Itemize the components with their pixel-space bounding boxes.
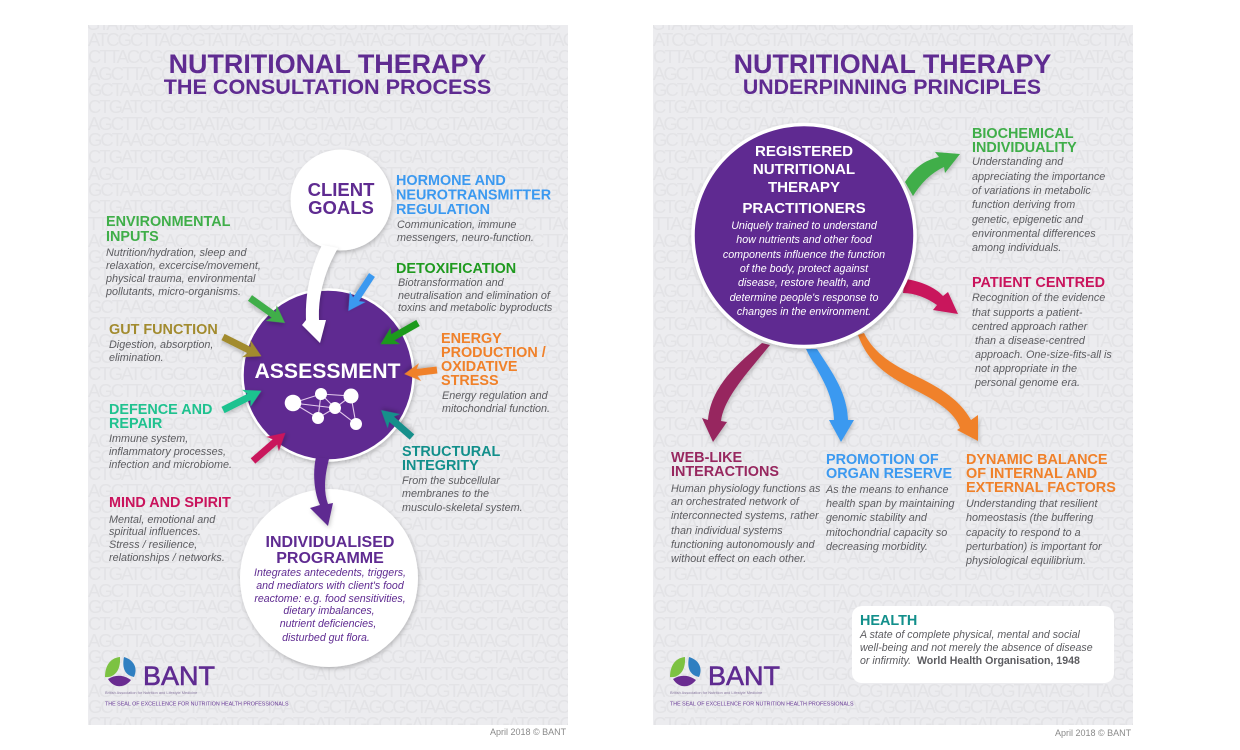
- text: promotion of organ reserve: PROMOTION OF: [826, 452, 939, 468]
- panel: the consultation process: AGCTTACCGTAATAGCTTACCGTAATAGCTTACCGTAATAGCTTACCG: [88, 163, 568, 184]
- client goals circle: [290, 150, 392, 250]
- registered practitioners circle: of the body, protect against: [740, 263, 869, 275]
- panel: the consultation process: AGCTTACCGTAATAGCTTACCGTAATAGCTTACCGTAATAGCTTACCG: [88, 380, 568, 401]
- arrow: defence and repair: [219, 382, 266, 418]
- panel: the consultation process: AGCTTACCGTAATAGCTTACCGTAATAGCTTACCGTAATAGCTTACCG: [88, 430, 568, 451]
- arrow: biochemical individuality: [905, 152, 960, 196]
- callout: health definition: or infirmity.: [860, 655, 911, 667]
- text: defence and repair: DEFENCE AND: [109, 402, 212, 418]
- BANT logo: [670, 657, 854, 708]
- text: hormone and neurotransmitter regulation: NEUROTRANSMITTER: [396, 188, 552, 204]
- text: biochemical individuality: appreciating the importance: [972, 171, 1105, 183]
- text: promotion of organ reserve: As the means to enhance: [825, 484, 948, 496]
- arrow: detoxification: [376, 315, 423, 352]
- registered practitioners circle: PRACTITIONERS: [742, 200, 866, 217]
- client goals circle: CLIENT: [308, 179, 375, 200]
- text: defence and repair: REPAIR: [109, 416, 163, 432]
- text: patient centred: [972, 275, 1112, 389]
- callout: health definition: well-being and not merely the absence of disease: [860, 642, 1093, 654]
- client goals circle: GOALS: [308, 197, 374, 218]
- text: defence and repair: [109, 402, 232, 471]
- text: dynamic balance: capacity to respond to a: [966, 527, 1081, 539]
- text: environmental inputs: [105, 214, 261, 298]
- text: biochemical individuality: environmental differences: [972, 228, 1096, 240]
- panel: underpinning principles: AGCTTACCGTAATAGCTTACCGTAATAGCTTACCGTAATAGCTTACCG: [653, 480, 1133, 501]
- BANT logo: THE SEAL OF EXCELLENCE FOR NUTRITION HEALTH PROFESSIONALS: [105, 702, 289, 708]
- arrow: environmental inputs: [244, 290, 291, 331]
- panel: the consultation process: AGCTTACCGTAATAGCTTACCGTAATAGCTTACCGTAATAGCTTACCG: [88, 530, 568, 551]
- arrow: structural integrity: [375, 403, 418, 444]
- BANT logo: THE SEAL OF EXCELLENCE FOR NUTRITION HEALTH PROFESSIONALS: [670, 702, 854, 708]
- title: UNDERPINNING PRINCIPLES: [743, 75, 1041, 99]
- panel: underpinning principles: AGCTTACCGTAATAGCTTACCGTAATAGCTTACCGTAATAGCTTACCG: [653, 113, 1133, 134]
- title: [164, 49, 491, 99]
- panel: underpinning principles: AGCTTACCGTAATAGCTTACCGTAATAGCTTACCGTAATAGCTTACCG: [653, 380, 1133, 401]
- arrow: promotion of organ reserve: [806, 349, 854, 442]
- text: energy production: OXIDATIVE: [441, 359, 518, 375]
- individualised programme circle: Integrates antecedents, triggers,: [254, 567, 406, 579]
- text: dynamic balance: Understanding that resilient: [966, 498, 1098, 510]
- title: THE CONSULTATION PROCESS: [164, 74, 491, 99]
- text: energy production: [441, 331, 550, 415]
- registered practitioners circle: [693, 124, 915, 346]
- callout: health definition: [852, 606, 1114, 683]
- text: environmental inputs: relaxation, excercise/movement,: [106, 260, 261, 272]
- text: environmental inputs: pollutants, micro-organisms.: [105, 286, 241, 298]
- text: patient centred: approach. One-size-fits-all is: [975, 349, 1112, 361]
- text: mind and spirit: relationships / networks.: [109, 552, 225, 564]
- text: detoxification: [396, 261, 553, 314]
- panel: the consultation process: AGCTTACCGTAATAGCTTACCGTAATAGCTTACCGTAATAGCTTACCG: [88, 63, 568, 84]
- text: web-like interactions: without effect on each other.: [671, 553, 806, 565]
- text: mind and spirit: spiritual influences.: [109, 526, 201, 538]
- text: hormone and neurotransmitter regulation: Communication, immune: [397, 219, 516, 231]
- text: patient centred: that supports a patient-: [972, 307, 1083, 319]
- text: dynamic balance: OF INTERNAL AND: [966, 466, 1097, 482]
- text: environmental inputs: INPUTS: [106, 229, 159, 245]
- text: defence and repair: infection and microbiome.: [109, 459, 232, 471]
- panel: underpinning principles: AGCTTACCGTAATAGCTTACCGTAATAGCTTACCGTAATAGCTTACCG: [653, 630, 1133, 651]
- footer: right date: April 2018 © BANT: [1055, 728, 1132, 738]
- text: web-like interactions: interconnected systems, rather: [671, 510, 819, 522]
- text: web-like interactions: than individual systems: [671, 525, 783, 537]
- panel: the consultation process: AGCTTACCGTAATAGCTTACCGTAATAGCTTACCGTAATAGCTTACCG: [88, 330, 568, 351]
- individualised programme circle: and mediators with client's food: [256, 580, 405, 592]
- registered practitioners circle: THERAPY: [768, 179, 840, 196]
- text: patient centred: centred approach rather: [972, 321, 1088, 333]
- BANT logo: BANT: [708, 661, 780, 691]
- text: environmental inputs: ENVIRONMENTAL: [106, 214, 231, 230]
- text: biochemical individuality: Understanding and: [972, 156, 1064, 168]
- text: biochemical individuality: of variations in metabolic: [972, 185, 1091, 197]
- text: patient centred: not appropriate in the: [975, 363, 1077, 375]
- text: web-like interactions: WEB-LIKE: [671, 450, 743, 466]
- text: energy production: ENERGY: [441, 331, 502, 347]
- callout: health definition: HEALTH: [860, 613, 917, 629]
- text: energy production: STRESS: [441, 373, 499, 389]
- footer: left date: April 2018 © BANT: [490, 727, 567, 737]
- text: biochemical individuality: function deriving from: [972, 199, 1075, 211]
- text: detoxification: toxins and metabolic byproducts: [398, 302, 553, 314]
- text: defence and repair: inflammatory processes,: [109, 446, 226, 458]
- panel: the consultation process: AGCTTACCGTAATAGCTTACCGTAATAGCTTACCGTAATAGCTTACCG: [88, 680, 568, 701]
- callout: health definition: A state of complete physical, mental and social: [859, 629, 1080, 641]
- arrow: client goals to assessment: [302, 245, 338, 343]
- panel: underpinning principles: [653, 25, 1133, 725]
- arrow: hormone regulation: [340, 270, 380, 316]
- registered practitioners circle: Uniquely trained to understand: [731, 220, 878, 232]
- text: structural integrity: musculo-skeletal system.: [402, 502, 523, 514]
- individualised programme circle: dietary imbalances,: [283, 605, 375, 617]
- registered practitioners circle: changes in the environment.: [737, 306, 871, 318]
- panel: the consultation process: AGCTTACCGTAATAGCTTACCGTAATAGCTTACCGTAATAGCTTACCG: [88, 580, 568, 601]
- text: mind and spirit: [109, 495, 231, 564]
- arrow: assessment to programme: [310, 457, 333, 526]
- panel: underpinning principles: AGCTTACCGTAATAGCTTACCGTAATAGCTTACCGTAATAGCTTACCG: [653, 163, 1133, 184]
- arrow: gut function: [219, 329, 266, 365]
- text: structural integrity: From the subcellular: [402, 475, 500, 487]
- individualised programme circle: disturbed gut flora.: [282, 632, 370, 644]
- text: patient centred: personal genome era.: [974, 377, 1080, 389]
- arrow: mind and spirit: [247, 426, 292, 468]
- text: energy production: PRODUCTION /: [441, 345, 546, 361]
- arrow: patient centred: [903, 279, 958, 314]
- text: patient centred: Recognition of the evidence: [972, 292, 1105, 304]
- text: mind and spirit: MIND AND SPIRIT: [109, 495, 231, 511]
- text: gut function: Digestion, absorption,: [109, 339, 213, 351]
- panel: the consultation process: AGCTTACCGTAATAGCTTACCGTAATAGCTTACCGTAATAGCTTACCG: [88, 630, 568, 651]
- icon: network: [285, 388, 362, 430]
- panel: the consultation process: AGCTTACCGTAATAGCTTACCGTAATAGCTTACCGTAATAGCTTACCG: [88, 280, 568, 301]
- text: energy production: Energy regulation and: [442, 390, 549, 402]
- text: promotion of organ reserve: health span by maintaining: [826, 498, 954, 510]
- text: biochemical individuality: BIOCHEMICAL: [972, 126, 1074, 142]
- text: dynamic balance: homeostasis (the buffering: [966, 512, 1093, 524]
- panel: the consultation process: AGCTTACCGTAATAGCTTACCGTAATAGCTTACCGTAATAGCTTACCG: [88, 113, 568, 134]
- text: dynamic balance: EXTERNAL FACTORS: [966, 480, 1116, 496]
- BANT logo: British Association for Nutrition and Lifestyle Medicine: [105, 690, 197, 695]
- text: energy production: mitochondrial function.: [442, 403, 550, 415]
- text: promotion of organ reserve: mitochondrial capacity so: [826, 527, 947, 539]
- individualised programme circle: INDIVIDUALISED: [266, 534, 394, 551]
- text: environmental inputs: physical trauma, environmental: [105, 273, 256, 285]
- text: dynamic balance: DYNAMIC BALANCE: [966, 452, 1108, 468]
- title: NUTRITIONAL THERAPY: [734, 49, 1051, 79]
- callout: health definition: World Health Organisation, 1948: [917, 655, 1080, 667]
- BANT logo: BANT: [143, 661, 215, 691]
- text: structural integrity: membranes to the: [402, 488, 489, 500]
- text: gut function: elimination.: [109, 352, 164, 364]
- registered practitioners circle: determine people's response to: [730, 292, 878, 304]
- arrow: energy production: [403, 361, 438, 383]
- arrow: web-like interactions: [702, 343, 770, 442]
- text: promotion of organ reserve: genomic stability and: [826, 512, 928, 524]
- text: environmental inputs: Nutrition/hydration, sleep and: [106, 247, 247, 259]
- text: promotion of organ reserve: [825, 452, 954, 553]
- text: hormone and neurotransmitter regulation: REGULATION: [396, 202, 490, 218]
- text: dynamic balance: physiological equilibrium.: [965, 555, 1086, 567]
- arrow: dynamic balance: [858, 333, 978, 441]
- panel: underpinning principles: AGCTTACCGTAATAGCTTACCGTAATAGCTTACCGTAATAGCTTACCG: [653, 330, 1133, 351]
- text: defence and repair: Immune system,: [109, 433, 188, 445]
- title: NUTRITIONAL THERAPY: [169, 49, 486, 79]
- individualised programme circle: [240, 489, 418, 667]
- BANT logo: [105, 657, 289, 708]
- panel: the consultation process: [88, 25, 568, 725]
- registered practitioners circle: NUTRITIONAL: [753, 161, 855, 178]
- BANT logo: British Association for Nutrition and Lifestyle Medicine: [670, 690, 762, 695]
- title: [734, 49, 1051, 99]
- text: biochemical individuality: INDIVIDUALITY: [972, 140, 1077, 156]
- individualised programme circle: PROGRAMME: [276, 550, 384, 567]
- text: structural integrity: STRUCTURAL: [402, 444, 501, 460]
- panel: the consultation process: AGCTTACCGTAATAGCTTACCGTAATAGCTTACCGTAATAGCTTACCG: [88, 480, 568, 501]
- text: web-like interactions: functioning autonomously and: [671, 539, 815, 551]
- text: mind and spirit: Mental, emotional and: [109, 514, 216, 526]
- text: dynamic balance: [965, 452, 1116, 567]
- text: promotion of organ reserve: decreasing morbidity.: [826, 541, 928, 553]
- text: web-like interactions: [671, 450, 821, 565]
- text: detoxification: Biotransformation and: [398, 277, 505, 289]
- assessment circle: [242, 290, 414, 460]
- panel: underpinning principles: AGCTTACCGTAATAGCTTACCGTAATAGCTTACCGTAATAGCTTACCG: [653, 680, 1133, 701]
- panel: underpinning principles: AGCTTACCGTAATAGCTTACCGTAATAGCTTACCGTAATAGCTTACCG: [653, 63, 1133, 84]
- panel: underpinning principles: AGCTTACCGTAATAGCTTACCGTAATAGCTTACCGTAATAGCTTACCG: [653, 580, 1133, 601]
- text: gut function: [109, 322, 218, 364]
- individualised programme circle: nutrient deficiencies,: [280, 618, 376, 630]
- registered practitioners circle: how nutrients and other food: [736, 234, 873, 246]
- text: detoxification: neutralisation and elimination of: [398, 290, 551, 302]
- text: biochemical individuality: [972, 126, 1105, 254]
- registered practitioners circle: REGISTERED: [755, 143, 853, 160]
- text: hormone and neurotransmitter regulation: [396, 173, 552, 244]
- text: hormone and neurotransmitter regulation: messengers, neuro-function.: [397, 232, 534, 244]
- text: gut function: GUT FUNCTION: [109, 322, 218, 338]
- text: patient centred: PATIENT CENTRED: [972, 275, 1105, 291]
- text: patient centred: than a disease-centred: [975, 335, 1086, 347]
- text: detoxification: DETOXIFICATION: [396, 261, 516, 277]
- text: structural integrity: INTEGRITY: [402, 458, 479, 474]
- text: structural integrity: [402, 444, 523, 514]
- text: hormone and neurotransmitter regulation: HORMONE AND: [396, 173, 506, 189]
- text: biochemical individuality: genetic, epigenetic and: [972, 214, 1084, 226]
- panel: underpinning principles: AGCTTACCGTAATAGCTTACCGTAATAGCTTACCGTAATAGCTTACCG: [653, 530, 1133, 551]
- text: web-like interactions: Human physiology functions as: [671, 483, 821, 495]
- text: mind and spirit: Stress / resilience,: [109, 539, 197, 551]
- text: web-like interactions: INTERACTIONS: [671, 464, 779, 480]
- text: promotion of organ reserve: ORGAN RESERVE: [826, 466, 952, 482]
- panel: underpinning principles: AGCTTACCGTAATAGCTTACCGTAATAGCTTACCGTAATAGCTTACCG: [653, 280, 1133, 301]
- assessment circle: ASSESSMENT: [254, 360, 401, 383]
- panel: underpinning principles: AGCTTACCGTAATAGCTTACCGTAATAGCTTACCGTAATAGCTTACCG: [653, 430, 1133, 451]
- text: biochemical individuality: among individuals.: [972, 242, 1061, 254]
- registered practitioners circle: disease, restore health, and: [738, 277, 871, 289]
- individualised programme circle: reactome: e.g. food sensitivities,: [254, 593, 406, 605]
- text: web-like interactions: an orchestrated network of: [671, 496, 800, 508]
- registered practitioners circle: components influence the function: [723, 249, 885, 261]
- text: dynamic balance: perturbation) is important for: [965, 541, 1102, 553]
